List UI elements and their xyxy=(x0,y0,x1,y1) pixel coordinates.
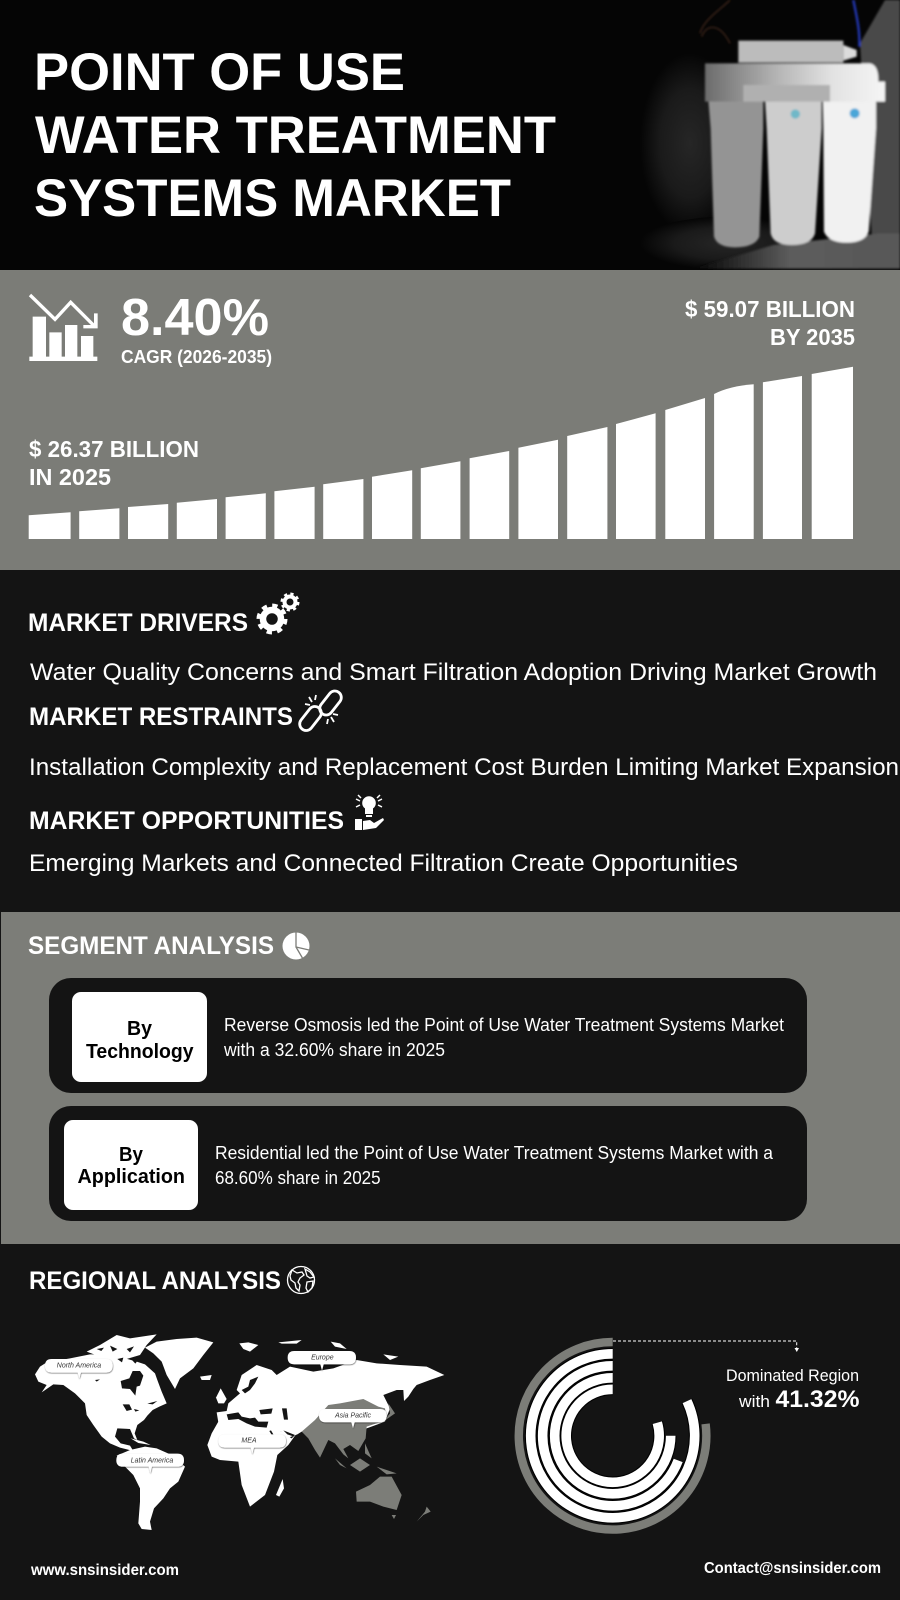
2025 base value: $ 26.37 BILLION xyxy=(29,436,199,462)
card: by technology: Reverse Osmosis led the Point of Use Water Treatment Systems Market xyxy=(224,1015,784,1035)
card: by application: Residential led the Point of Use Water Treatment Systems Market with a xyxy=(215,1143,774,1163)
card: by technology xyxy=(49,978,807,1093)
Americas and Greenland xyxy=(35,1334,213,1530)
icon: globe xyxy=(288,1266,314,1294)
callout: Europe: Europe xyxy=(311,1355,334,1362)
arrow: dashed leader to dominated region xyxy=(613,1341,799,1352)
title: SYSTEMS MARKET xyxy=(34,169,511,228)
2025 base value xyxy=(29,436,199,490)
title: POINT OF USE xyxy=(34,43,405,102)
2035 forecast value: $ 59.07 BILLION xyxy=(685,296,855,322)
panel: regional analysis xyxy=(29,1266,860,1530)
2035 forecast value: BY 2035 xyxy=(770,324,855,350)
heading: segment analysis: SEGMENT ANALYSIS xyxy=(28,932,274,960)
callout: MEA: MEA xyxy=(241,1438,257,1445)
text: dominated region: 41.32% xyxy=(776,1386,860,1413)
2035 forecast value xyxy=(685,296,855,350)
callout: Europe xyxy=(288,1351,356,1371)
card: by application: By xyxy=(119,1144,144,1166)
callout: Latin America xyxy=(116,1454,184,1473)
2025 base value: IN 2025 xyxy=(29,464,111,490)
icon: hand with light bulb xyxy=(355,795,384,830)
text: restraints: Installation Complexity and Replacement Cost Burden Limiting Market Expansion xyxy=(29,754,899,781)
text: dominated region: Dominated Region xyxy=(726,1367,859,1385)
panel: market size xyxy=(0,270,900,570)
icon: gears xyxy=(258,594,298,632)
heading: market restraints: MARKET RESTRAINTS xyxy=(29,703,293,731)
card: by technology: By xyxy=(127,1018,153,1040)
world map xyxy=(35,1334,444,1530)
footer: contact email: Contact@snsinsider.com xyxy=(704,1560,881,1577)
text: dominated region: with xyxy=(738,1393,770,1411)
Europe, Africa, Asia xyxy=(207,1340,444,1522)
panel: market dynamics xyxy=(28,594,899,877)
icon: pie chart xyxy=(282,932,310,960)
CAGR value: 8.40% xyxy=(121,289,269,347)
CAGR label: CAGR (2026-2035) xyxy=(121,347,272,367)
Asia Pacific highlight xyxy=(302,1399,431,1522)
callout: Latin America: Latin America xyxy=(131,1457,173,1464)
title: WATER TREATMENT xyxy=(35,106,556,165)
heading: regional analysis: REGIONAL ANALYSIS xyxy=(29,1267,281,1295)
heading: market opportunities: MARKET OPPORTUNITIES xyxy=(29,807,344,835)
footer: website: www.snsinsider.com xyxy=(30,1562,179,1579)
radial chart: dominated region share xyxy=(519,1342,706,1530)
callout: MEA xyxy=(218,1434,286,1454)
card: by technology: with a 32.60% share in 2025 xyxy=(223,1040,445,1060)
icon: broken chain link xyxy=(297,688,344,733)
icon: bar chart with arrow xyxy=(29,295,98,361)
bar chart: growth 2025 to 2035 xyxy=(29,367,853,539)
text: opportunities: Emerging Markets and Connected Filtration Create Opportunities xyxy=(29,850,738,877)
callout: North America xyxy=(45,1359,113,1379)
photo: water filter system xyxy=(640,0,900,270)
card: by application: 68.60% share in 2025 xyxy=(215,1168,381,1188)
panel: segment analysis xyxy=(1,912,900,1244)
text: dominated region xyxy=(726,1367,860,1413)
heading: market drivers: MARKET DRIVERS xyxy=(28,609,248,637)
callout: North America: North America xyxy=(57,1363,101,1370)
card: by application: Application xyxy=(78,1166,185,1188)
card: by application xyxy=(49,1106,807,1221)
text: drivers: Water Quality Concerns and Smart Filtration Adoption Driving Market Growth xyxy=(30,659,877,686)
callout: Asia Pacific xyxy=(319,1409,387,1428)
callout: Asia Pacific: Asia Pacific xyxy=(334,1412,372,1419)
title xyxy=(34,43,556,228)
header panel xyxy=(0,0,900,270)
card: by technology: Technology xyxy=(86,1041,194,1063)
